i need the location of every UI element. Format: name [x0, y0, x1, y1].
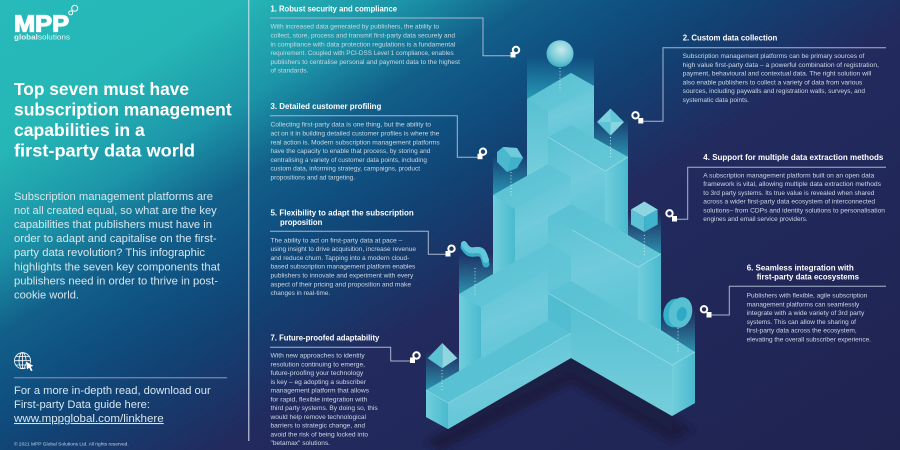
body 4: across a wider first-party data ecosystem of interconnected	[703, 199, 876, 206]
body 3: have the capacity to enable that process, by storing and	[270, 148, 431, 155]
icon: diamond	[597, 108, 624, 136]
icon: globe with cursor	[14, 353, 34, 372]
body 3: act on it in building detailed customer profiles is where the	[270, 130, 440, 138]
top column	[527, 73, 594, 176]
body 7: management platform that allows	[270, 388, 369, 395]
call to action text: For a more in-depth read, download our	[14, 385, 211, 397]
title: Top seven must have	[14, 79, 189, 99]
connector 7	[270, 347, 420, 363]
body 3: Collecting first-party data is one thing, but the ability to	[270, 122, 432, 129]
body 5: aspect of their pricing and proposition and make	[270, 281, 412, 288]
second tier right	[548, 125, 628, 235]
body 3: centralising a variety of customer data points, including	[270, 157, 428, 164]
base left	[426, 320, 571, 429]
body 5	[270, 237, 417, 297]
intro text: cookie world.	[14, 289, 79, 301]
connector 1	[270, 18, 519, 58]
logo: MPP Global Solutions	[14, 5, 78, 42]
section 3: Detailed customer profiling	[270, 102, 486, 181]
body 3	[270, 122, 440, 181]
body 7	[269, 353, 378, 447]
body 4: A subscription management platform built on an open data	[703, 172, 875, 179]
body 5: changes in real-time.	[270, 290, 331, 297]
body 7: avoid the risk of being locked into	[270, 432, 369, 438]
body 7: future-proofing your technology	[270, 370, 364, 377]
body 4: engines and email service providers.	[703, 216, 808, 223]
call to action text: www.mppglobal.com/linkhere	[13, 413, 164, 425]
icon: cube	[631, 202, 658, 232]
body 4	[703, 172, 886, 223]
body 3: real action is. Modern subscription management platforms	[270, 139, 440, 146]
body 2: sources, including paywalls and registration walls, surveys, and	[683, 88, 866, 95]
body 1: of standards.	[270, 68, 309, 74]
body 5: based subscription management platform enables	[270, 264, 415, 271]
connector 2	[632, 48, 886, 124]
intro text: highlights the seven key components that	[14, 261, 220, 273]
body 2	[683, 53, 879, 104]
body 5: publishers to innovate and experiment with every	[270, 272, 414, 280]
intro text: order to adapt and capitalise on the first-	[14, 233, 217, 245]
section 5: Flexibility to adapt the subscription proposition	[270, 208, 455, 297]
heading 1: 1. Robust security and compliance	[270, 5, 397, 14]
dotted connectors	[442, 68, 678, 392]
intro text: party data revolution? This infographic	[14, 247, 206, 259]
body 2: high value first-party data – a powerful combination of registration,	[683, 62, 879, 69]
body 7: would help remove technological	[269, 414, 366, 421]
intro text: capabilities that publishers must have in	[14, 219, 212, 231]
icon: twisted ribbon	[464, 244, 486, 264]
call to action text: First-party Data guide here:	[14, 399, 150, 411]
icon: sphere	[546, 40, 574, 67]
connector 6	[701, 286, 886, 318]
body 7: barriers to strategic change, and	[270, 423, 366, 430]
heading 4: 4. Support for multiple data extraction methods	[703, 153, 884, 162]
body 7: With new approaches to identity	[270, 353, 366, 360]
body 2: also enable publishers to collect a variety of data from various	[683, 79, 862, 86]
body 4: solutions– from CDPs and identity solutions to personalisation	[703, 208, 886, 214]
body 1: collect, store, process and transmit first-party data securely and	[270, 32, 456, 40]
title	[14, 79, 232, 161]
body 7: third party systems. By doing so, this	[270, 405, 378, 412]
isometric block structure	[426, 42, 695, 450]
body 5: The ability to act on first-party data at pace –	[270, 237, 403, 244]
icon: polyhedron	[497, 147, 523, 172]
body 1: publishers to centralise personal and payment data to the highest	[270, 59, 460, 66]
heading 2: 2. Custom data collection	[683, 34, 777, 43]
silhouette base	[426, 73, 695, 429]
connector 4	[666, 167, 886, 222]
glows	[426, 42, 695, 390]
title: first-party data world	[14, 141, 195, 161]
third tier left	[459, 243, 571, 371]
connector 5	[270, 231, 455, 256]
body 2: payment, behavioural and contextual data. The right solution will	[683, 70, 871, 78]
vertical divider	[248, 0, 249, 441]
body 6: Publishers with flexible, agile subscription	[747, 293, 868, 300]
heading 5: 5. Flexibility to adapt the subscription	[270, 208, 414, 217]
body 1: in compliance with data protection regulations is a fundamental	[270, 41, 455, 48]
body 3: custom data, informing strategy, campaigns, product	[270, 166, 420, 173]
body 7: is key – eg adopting a subscriber	[270, 379, 366, 386]
section 6: Seamless integration with first-party data ecosystems	[701, 263, 886, 343]
body 4: to 3rd party systems. Its true value is revealed when shared	[703, 190, 875, 197]
heading 3: 3. Detailed customer profiling	[270, 102, 381, 111]
copyright: © 2021 MPP Global Solutions Ltd. All rights reserved.	[14, 440, 129, 446]
heading 5	[270, 208, 414, 227]
body 6: integrate with a wide variety of 3rd party	[747, 310, 865, 317]
intro text: publishers need in order to thrive in post-	[14, 275, 218, 287]
body 1: requirement. Coupled with PCI-DSS Level 1 compliance, enables	[270, 50, 454, 57]
heading 7: 7. Future-proofed adaptability	[270, 333, 380, 342]
intro text: Subscription management platforms are	[14, 191, 213, 203]
call to action text	[13, 385, 211, 425]
body 4: framework is vital, allowing multiple data extraction methods	[703, 181, 881, 188]
section 2: Custom data collection	[632, 34, 886, 124]
intro text: not all created equal, so what are the key	[14, 205, 217, 217]
body 1: With increased data generated by publishers, the ability to	[270, 24, 440, 31]
base right	[548, 281, 695, 416]
heading 6: first-party data ecosystems	[757, 273, 859, 282]
logo: MPP Global Solutions: globalsolutions	[14, 33, 70, 42]
body 6: first-party data across the ecosystem,	[747, 328, 857, 335]
divider	[14, 377, 227, 378]
section 7: Future-proofed adaptability	[269, 333, 420, 447]
body 1	[270, 24, 460, 74]
body 7: for rapid, flexible integration with	[270, 396, 368, 404]
section 4: Support for multiple data extraction methods	[666, 153, 886, 223]
shadow	[426, 358, 694, 450]
icon: pyramid	[428, 343, 457, 368]
icon: ring	[660, 295, 696, 330]
body 5: and reduce churn. Tapping into a modern cloud-	[270, 255, 409, 262]
body 6: elevating the overall subscriber experience.	[747, 336, 871, 343]
body 3: propositions and ad targeting.	[270, 174, 355, 181]
body 5: using insight to drive acquisition, increase revenue	[270, 246, 417, 253]
third tier right	[548, 204, 661, 330]
logo: MPP Global Solutions: MPP	[14, 11, 69, 37]
body 2: Subscription management platforms can be primary sources of	[683, 53, 865, 60]
connector 3	[270, 116, 486, 159]
heading 6: 6. Seamless integration with	[747, 263, 854, 272]
heading 5: proposition	[280, 218, 322, 227]
body 6: management platforms can seamlessly	[747, 301, 860, 308]
intro text	[14, 191, 220, 301]
panel: introduction	[13, 5, 232, 446]
body 2: systematic data points.	[683, 97, 749, 104]
body 6	[747, 293, 871, 343]
title: capabilities in a	[14, 120, 145, 140]
body 6: systems. This can allow the sharing of	[747, 319, 856, 326]
body 7: resolution continuing to emerge,	[270, 361, 365, 368]
second tier left	[493, 164, 571, 274]
body 7: "betamax" solutions.	[270, 440, 330, 447]
heading 6	[747, 263, 859, 282]
section 1: Robust security and compliance	[270, 5, 519, 75]
title: subscription management	[14, 100, 232, 120]
